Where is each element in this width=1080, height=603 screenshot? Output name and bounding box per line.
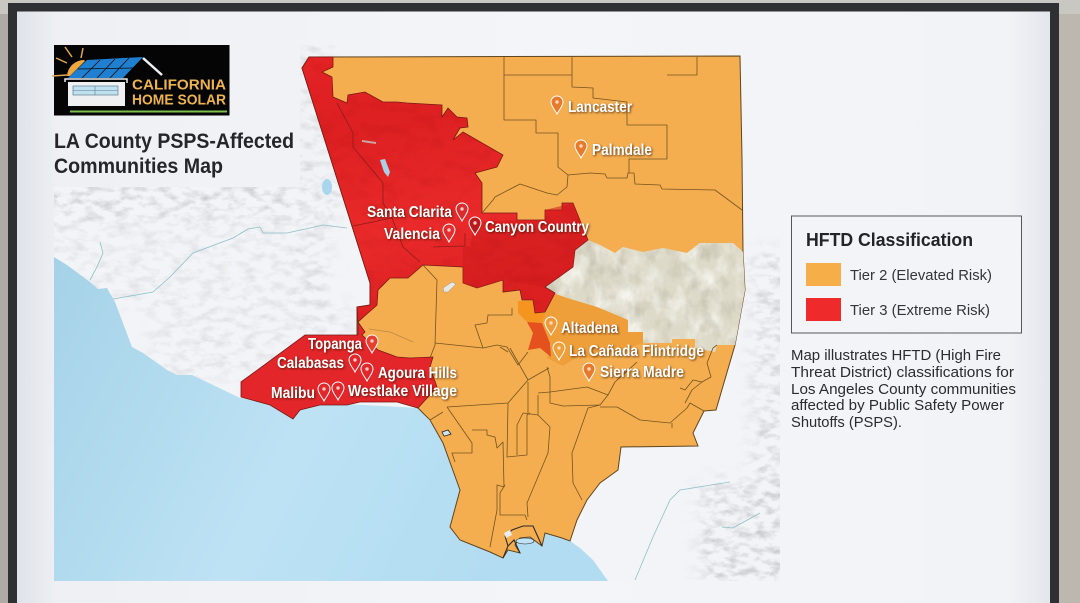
community labels: Valencia	[384, 226, 440, 243]
title: Communities Map	[54, 155, 223, 178]
darker orange foothills	[542, 293, 643, 366]
legend: HFTD classification	[792, 216, 1022, 333]
harbor	[442, 430, 542, 558]
pin: Palmdale	[575, 140, 587, 158]
community labels	[271, 99, 704, 402]
tier 3 malibu coast	[241, 322, 437, 419]
pin: Altadena	[545, 317, 557, 335]
logo text	[132, 76, 226, 108]
pin: Malibu	[318, 383, 330, 401]
legend heading: HFTD Classification	[806, 230, 973, 250]
red-orange area	[527, 322, 551, 357]
ocean	[54, 257, 608, 581]
community labels: Lancaster	[568, 99, 632, 116]
logo text: CALIFORNIA	[132, 76, 226, 94]
community labels: Altadena	[561, 320, 618, 337]
land	[54, 187, 780, 581]
description text: Map illustrates HFTD (High Fire	[791, 348, 1001, 364]
pin: Canyon Country	[469, 217, 481, 235]
community labels: Canyon Country	[485, 219, 589, 236]
legend item: tier 3	[806, 298, 990, 321]
icon: sun	[52, 47, 85, 76]
community labels: Santa Clarita	[367, 204, 452, 221]
map base	[54, 45, 780, 581]
community labels: Malibu	[271, 385, 315, 402]
legend item: tier 2	[806, 263, 992, 286]
district boundaries	[337, 57, 742, 547]
community labels: Palmdale	[592, 142, 652, 159]
community labels: Topanga	[308, 336, 362, 353]
logo green line	[70, 110, 227, 112]
logo: California Home Solar	[52, 45, 230, 116]
pin: La Canada Flintridge	[553, 342, 565, 360]
map pins	[318, 96, 595, 401]
legend item: tier 3: Tier 3 (Extreme Risk)	[850, 302, 990, 319]
description text: Los Angeles County communities	[791, 382, 1016, 398]
community labels: Sierra Madre	[600, 364, 684, 381]
pin: Westlake Village	[332, 382, 344, 400]
community labels: La Cañada Flintridge	[569, 343, 704, 360]
title	[54, 130, 294, 178]
land hill texture	[54, 45, 780, 581]
description text: Shutoffs (PSPS).	[791, 415, 902, 431]
pin: Agoura Hills	[361, 363, 373, 381]
legend item: tier 2: Tier 2 (Elevated Risk)	[850, 267, 992, 284]
tier 2 county base	[302, 56, 745, 558]
terrain area: unclassified	[540, 240, 750, 355]
description text	[791, 348, 1016, 431]
community labels: Westlake Village	[348, 383, 457, 400]
icon: house	[65, 58, 162, 106]
lakes	[362, 140, 456, 292]
title: LA County PSPS-Affected	[54, 130, 294, 153]
pin: Valencia	[443, 224, 455, 242]
pin: Santa Clarita	[456, 203, 468, 221]
pin: Topanga	[366, 335, 378, 353]
logo text: HOME SOLAR	[132, 92, 226, 108]
pin: Lancaster	[551, 96, 563, 114]
rivers	[90, 225, 760, 580]
icon: solar panels	[68, 57, 143, 78]
description text: affected by Public Safety Power	[791, 398, 1004, 414]
county map	[241, 55, 750, 558]
tier 3 north	[302, 57, 588, 322]
outer lake	[322, 179, 332, 195]
bright orange wedge	[518, 301, 545, 323]
community labels: Calabasas	[277, 355, 344, 372]
description text: Threat District) classifications for	[791, 365, 1014, 381]
canyon shade	[463, 203, 588, 288]
community labels: Agoura Hills	[378, 365, 457, 382]
red relief texture	[324, 129, 570, 245]
pin: Sierra Madre	[583, 363, 595, 381]
pin: Calabasas	[349, 354, 361, 372]
